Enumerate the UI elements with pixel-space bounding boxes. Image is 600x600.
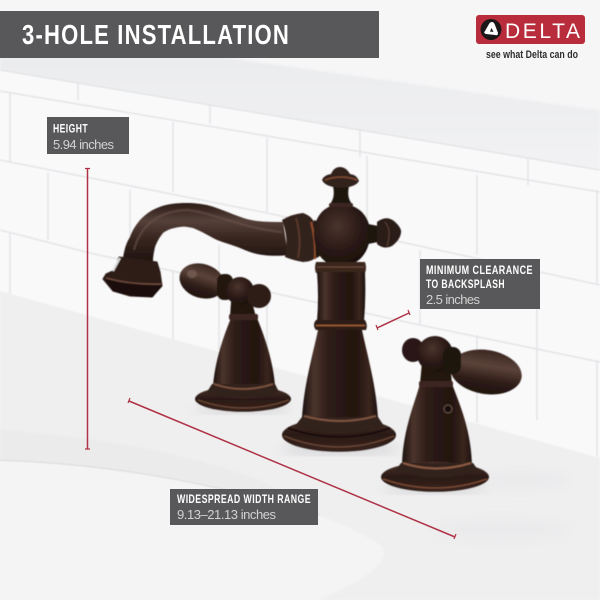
set screw	[444, 405, 452, 413]
marble veins	[430, 472, 570, 540]
cross knob	[247, 284, 271, 308]
lever band	[217, 274, 233, 300]
contact shadow	[280, 443, 400, 455]
sink basin	[0, 460, 384, 600]
finial	[322, 167, 359, 207]
spout arm	[123, 203, 288, 262]
Delta logo: see what Delta can do	[486, 49, 578, 61]
counter front edge	[0, 430, 320, 513]
spout highlight	[134, 210, 282, 250]
neck	[230, 302, 256, 317]
shelf shadow band	[0, 26, 600, 172]
hub ball	[314, 206, 370, 264]
label: height: 5.94 inches	[53, 137, 114, 152]
title banner: 3-HOLE INSTALLATION	[22, 19, 290, 50]
label: minimum clearance: MINIMUM CLEARANCE	[426, 263, 533, 277]
lever	[175, 258, 229, 304]
dimension line: clearance to backsplash	[376, 310, 410, 330]
bell	[213, 318, 275, 386]
copper ring	[314, 320, 367, 330]
lower bell	[302, 330, 378, 418]
title banner	[0, 11, 379, 58]
hub	[417, 336, 453, 372]
label: widespread width range: WIDESPREAD WIDTH RANGE	[177, 492, 311, 506]
base	[195, 384, 291, 412]
rail tile row	[0, 70, 600, 192]
label: height	[47, 117, 129, 154]
aerator nose	[103, 257, 162, 297]
label: widespread width range: 9.13–21.13 inches	[177, 507, 276, 522]
left knob	[402, 338, 424, 362]
label: minimum clearance: TO BACKSPLASH	[426, 277, 505, 291]
base	[282, 416, 396, 452]
dimension line: height	[85, 168, 90, 449]
upper body	[317, 272, 365, 321]
hub	[226, 277, 254, 305]
right cross knob	[368, 218, 401, 248]
neck ring	[229, 314, 258, 320]
label: widespread width range	[170, 489, 318, 525]
faucet: spout and centre body	[103, 167, 401, 455]
faucet: left handle	[175, 258, 291, 414]
counter top	[0, 291, 600, 600]
neck	[420, 362, 452, 384]
lever	[447, 345, 525, 399]
faucet: right handle	[381, 336, 525, 494]
collar band	[315, 262, 366, 273]
spout collar	[282, 213, 318, 262]
lever band	[443, 347, 461, 374]
label: minimum clearance: 2.5 inches	[426, 292, 480, 307]
bell	[402, 384, 472, 465]
dimension line: widespread width	[128, 398, 456, 539]
label: minimum clearance	[420, 259, 540, 309]
tile grout lines	[0, 70, 600, 457]
Delta logo: DELTA	[505, 20, 580, 43]
neck ring	[419, 381, 453, 387]
base	[381, 462, 489, 492]
Delta logo	[476, 15, 585, 61]
upper shelf	[0, 0, 600, 110]
icon: delta emblem	[480, 19, 502, 40]
label: height: HEIGHT	[53, 122, 88, 136]
